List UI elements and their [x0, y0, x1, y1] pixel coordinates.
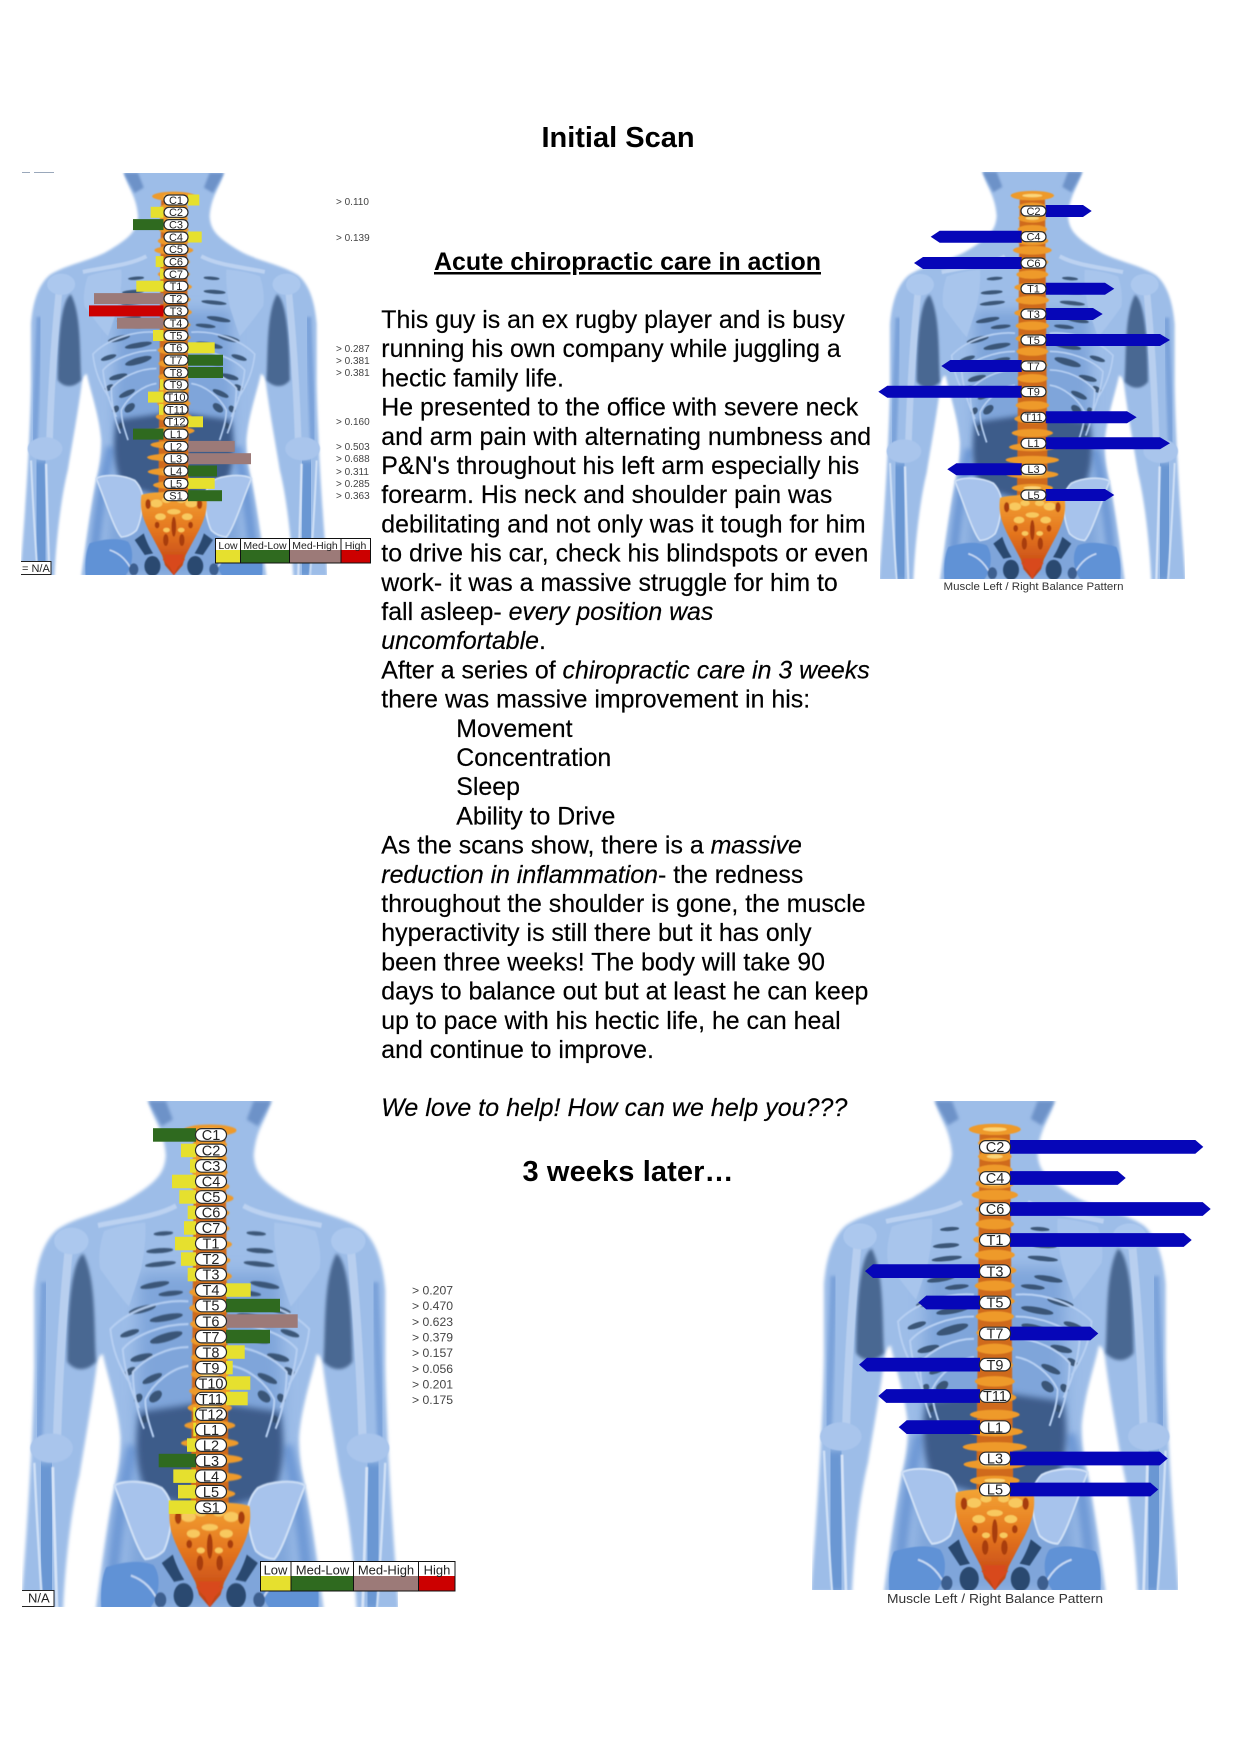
body text: and continue to improve. — [381, 1036, 654, 1064]
vertebra labels: L3 — [1027, 464, 1040, 476]
body text: hectic family life. — [381, 364, 564, 392]
vertebra labels: L1 — [987, 1420, 1003, 1436]
vertebra labels: T8 — [170, 367, 182, 379]
panel: follow-up chart, muscle activity — [21, 1098, 455, 1609]
panel: initial chart, muscle activity — [20, 170, 370, 577]
vertebra labels: C2 — [1026, 206, 1041, 218]
N/A key — [22, 1590, 54, 1606]
body text: reduction in inflammation- the redness — [381, 861, 803, 889]
vertebra labels: T7 — [170, 355, 182, 367]
values: > 0.381 — [336, 356, 370, 367]
body text: throughout the shoulder is gone, the muscle — [381, 890, 866, 918]
vertebra labels: T12 — [167, 417, 185, 429]
body text: debilitating and not only was it tough for him — [381, 510, 866, 538]
vertebra labels: L4 — [170, 466, 182, 478]
vertebra labels: T1 — [203, 1237, 219, 1253]
vertebra labels: L5 — [203, 1485, 219, 1501]
values: > 0.470 — [412, 1299, 453, 1313]
vertebra labels — [164, 195, 188, 503]
body text: This guy is an ex rugby player and is busy — [381, 306, 845, 334]
body text: hyperactivity is still there but it has only — [381, 919, 812, 947]
vertebra labels: C1 — [169, 195, 183, 207]
body text: Ability to Drive — [456, 802, 615, 830]
vertebra labels: T5 — [987, 1296, 1003, 1312]
body text: up to pace with his hectic life, he can heal — [381, 1007, 841, 1035]
vertebra labels: L1 — [203, 1423, 219, 1439]
vertebra labels: T7 — [203, 1330, 219, 1346]
vertebra labels: L1 — [170, 429, 182, 441]
vertebra labels: L3 — [203, 1454, 219, 1470]
vertebra labels: T3 — [1027, 309, 1040, 321]
values: > 0.201 — [412, 1378, 453, 1392]
legend: High — [424, 1562, 450, 1578]
vertebra labels: L5 — [1027, 490, 1040, 502]
vertebra labels: T9 — [203, 1361, 219, 1377]
values: > 0.110 — [336, 197, 369, 208]
vertebra labels — [1021, 206, 1046, 502]
vertebra labels: C7 — [169, 269, 183, 281]
body text: As the scans show, there is a massive — [381, 832, 802, 860]
vertebra labels: T12 — [198, 1407, 224, 1423]
vertebra labels: T10 — [167, 392, 185, 404]
legend: Low — [264, 1562, 288, 1578]
vertebra labels: C7 — [202, 1221, 220, 1237]
vertebra labels: T5 — [203, 1299, 219, 1315]
body text: uncomfortable. — [381, 627, 546, 655]
vertebra labels: T6 — [203, 1314, 219, 1330]
vertebra labels: T3 — [203, 1268, 219, 1284]
bars — [89, 194, 251, 501]
body text: to drive his car, check his blindspots or even — [381, 540, 868, 568]
values: > 0.285 — [336, 479, 370, 490]
vertebra labels: C3 — [169, 220, 183, 232]
arrows — [859, 1140, 1211, 1496]
N/A key: = N/A — [22, 563, 50, 575]
vertebra labels: C6 — [986, 1202, 1004, 1218]
vertebra labels: T8 — [203, 1345, 219, 1361]
vertebra labels: T4 — [203, 1283, 219, 1299]
body text: Concentration — [456, 744, 611, 772]
vertebra labels — [980, 1140, 1010, 1499]
body text: work- it was a massive struggle for him to — [380, 569, 838, 597]
subheading: 3 weeks later: 3 weeks later… — [522, 1156, 734, 1188]
vertebra labels: L2 — [203, 1438, 219, 1454]
body text: running his own company while juggling a — [381, 335, 841, 363]
body text: forearm. His neck and shoulder pain was — [381, 481, 832, 509]
legend: Med-Low — [243, 540, 287, 552]
vertebra labels: T11 — [167, 404, 185, 416]
vertebra labels: T11 — [1024, 412, 1043, 424]
body text: fall asleep- every position was — [381, 598, 713, 626]
bars — [153, 1128, 298, 1514]
vertebra labels: T10 — [198, 1376, 224, 1392]
title: Initial Scan: Initial Scan — [541, 122, 695, 154]
body text: days to balance out but at least he can keep — [381, 978, 868, 1006]
values: > 0.381 — [336, 368, 370, 379]
values: > 0.379 — [412, 1330, 453, 1344]
vertebra labels: T4 — [170, 318, 182, 330]
vertebra labels: C1 — [202, 1128, 220, 1144]
vertebra labels: S1 — [202, 1500, 220, 1516]
vertebra labels: T11 — [983, 1389, 1007, 1405]
vertebra labels: T3 — [170, 306, 182, 318]
vertebra labels: C3 — [202, 1159, 220, 1175]
vertebra labels: C2 — [986, 1140, 1004, 1156]
values: > 0.139 — [336, 233, 370, 244]
values: > 0.688 — [336, 454, 370, 465]
body text: P&N's throughout his left arm especially his — [381, 452, 859, 480]
body illustration — [20, 170, 328, 577]
legend: Med-High — [292, 540, 338, 552]
vertebra labels: T6 — [170, 343, 182, 355]
vertebra labels: T9 — [1027, 387, 1040, 399]
arrows — [878, 205, 1170, 501]
vertebra labels: C4 — [202, 1175, 220, 1191]
vertebra labels: T2 — [170, 294, 182, 306]
legend: Med-Low — [296, 1562, 350, 1578]
values: > 0.157 — [412, 1346, 453, 1360]
body text: Sleep — [456, 773, 520, 801]
body illustration — [879, 169, 1186, 581]
vertebra labels: T9 — [170, 380, 182, 392]
vertebra labels: T5 — [170, 330, 182, 342]
legend — [260, 1562, 455, 1591]
vertebra labels: C2 — [169, 207, 183, 219]
vertebra labels: L3 — [170, 454, 182, 466]
panel: follow-up chart, muscle balance — [811, 1098, 1211, 1606]
legend — [216, 538, 370, 563]
body text — [380, 306, 871, 1064]
vertebra labels — [196, 1128, 226, 1516]
values: > 0.311 — [336, 467, 369, 478]
values: > 0.160 — [336, 417, 370, 428]
values: > 0.175 — [412, 1393, 453, 1407]
vertebra labels: T2 — [203, 1252, 219, 1268]
section heading: Acute chiropractic care in action — [434, 248, 821, 276]
vertebra labels: T9 — [987, 1358, 1003, 1374]
vertebra labels: T7 — [987, 1327, 1003, 1343]
values: > 0.287 — [336, 344, 370, 355]
top edge marks — [22, 172, 54, 174]
legend: Med-High — [358, 1562, 414, 1578]
vertebra labels: L2 — [170, 441, 182, 453]
N/A key: N/A — [28, 1590, 50, 1606]
vertebra labels: C4 — [986, 1171, 1004, 1187]
vertebra labels: C5 — [169, 244, 183, 256]
values: > 0.056 — [412, 1362, 453, 1376]
vertebra labels: L1 — [1027, 438, 1040, 450]
vertebra labels: C6 — [202, 1206, 220, 1222]
panel: initial chart, muscle balance — [878, 169, 1186, 593]
vertebra labels: C5 — [202, 1190, 220, 1206]
legend: High — [345, 540, 366, 552]
legend: Low — [218, 540, 238, 552]
vertebra labels: C6 — [169, 256, 183, 268]
body illustration — [21, 1098, 399, 1609]
values: > 0.503 — [336, 442, 370, 453]
vertebra labels: T1 — [170, 281, 182, 293]
vertebra labels: C2 — [202, 1144, 220, 1160]
body text: been three weeks! The body will take 90 — [381, 948, 825, 976]
vertebra labels: S1 — [169, 491, 183, 503]
values: > 0.207 — [412, 1283, 453, 1297]
vertebra labels: C6 — [1026, 258, 1041, 270]
body text: and arm pain with alternating numbness and — [381, 423, 871, 451]
vertebra labels: L5 — [170, 478, 182, 490]
vertebra labels: T3 — [987, 1264, 1003, 1280]
closing question: We love to help! How can we help you??? — [381, 1094, 847, 1122]
values: > 0.623 — [412, 1315, 453, 1329]
caption: Muscle Left / Right Balance Pattern — [887, 1591, 1103, 1606]
vertebra labels: C4 — [1026, 232, 1041, 244]
vertebra labels: C4 — [169, 232, 183, 244]
body text: Movement — [456, 715, 573, 743]
body text: He presented to the office with severe neck — [381, 394, 859, 422]
caption: Muscle Left / Right Balance Pattern — [944, 581, 1124, 593]
values: > 0.363 — [336, 491, 370, 502]
vertebra labels: T11 — [199, 1392, 223, 1408]
vertebra labels: L3 — [987, 1452, 1003, 1468]
values — [412, 1283, 453, 1407]
vertebra labels: L5 — [987, 1483, 1003, 1499]
values — [336, 197, 370, 502]
vertebra labels: T1 — [987, 1233, 1003, 1249]
body text: After a series of chiropractic care in 3 weeks — [381, 656, 870, 684]
vertebra labels: L4 — [203, 1469, 219, 1485]
body text: there was massive improvement in his: — [381, 686, 810, 714]
vertebra labels: T5 — [1027, 335, 1040, 347]
vertebra labels: T7 — [1027, 361, 1040, 373]
body illustration — [811, 1098, 1179, 1592]
vertebra labels: T1 — [1027, 284, 1040, 296]
